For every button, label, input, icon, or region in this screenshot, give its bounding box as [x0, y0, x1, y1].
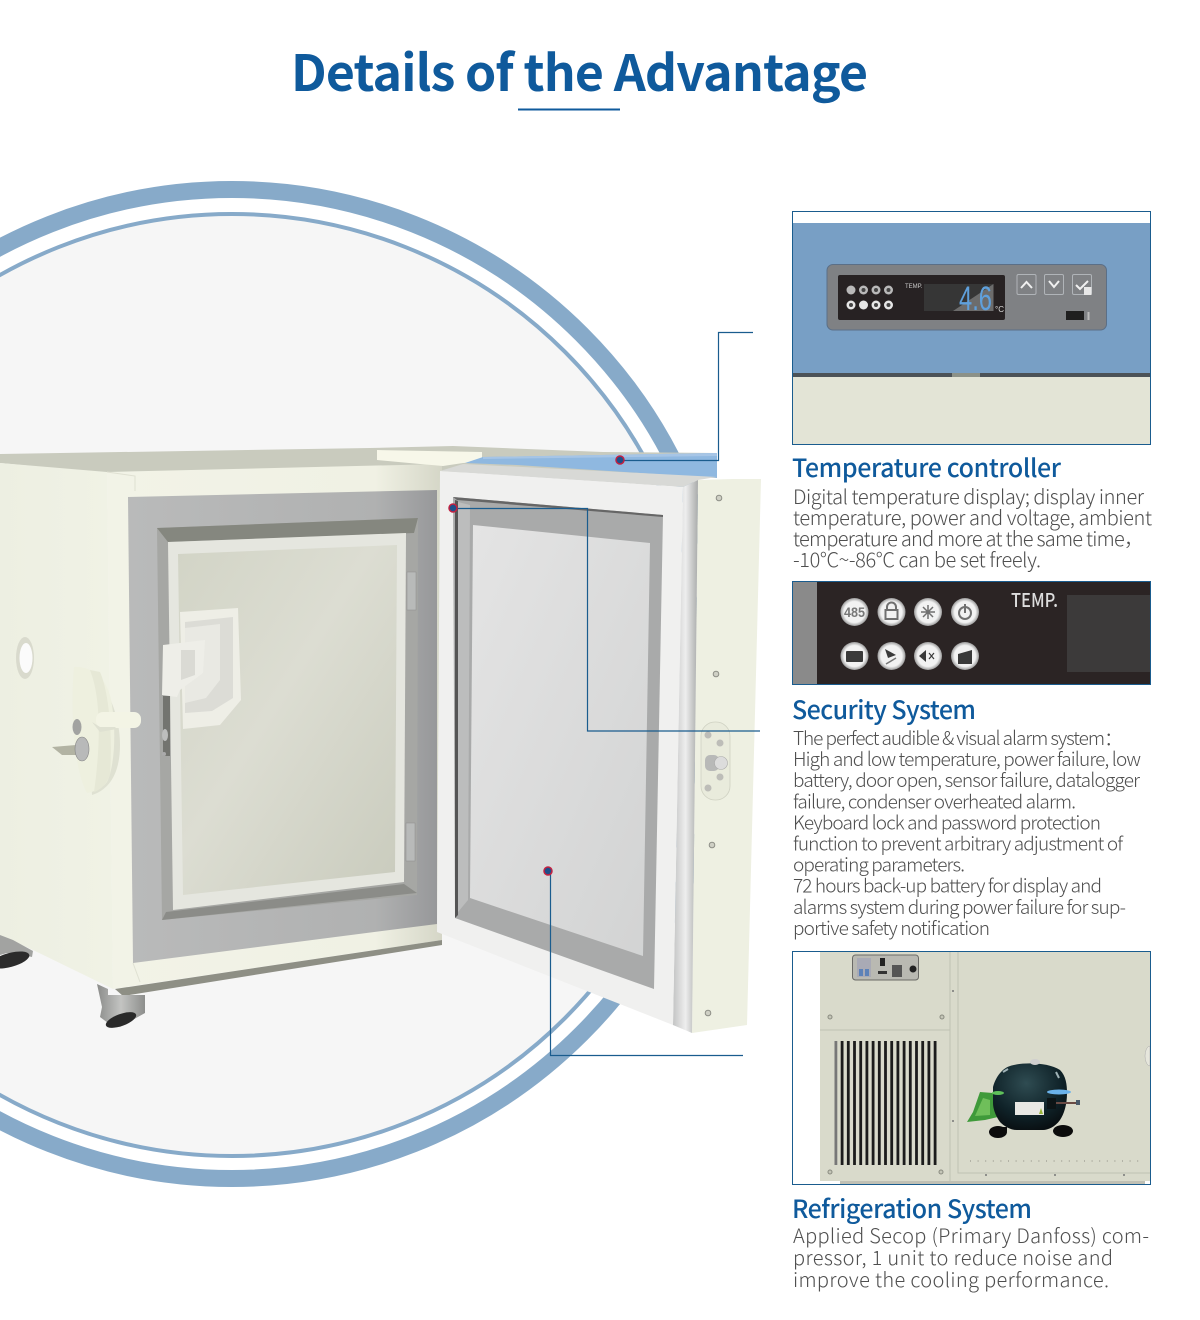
text: security system description: High and low temperature, power failure, low [793, 745, 1141, 772]
background circle rings [0, 190, 726, 1178]
freezer cabinet [0, 446, 717, 1031]
compressor [967, 1059, 1080, 1138]
door handle recess [162, 608, 241, 756]
text: refrigeration system description: Applied Secop (Primary Danfoss) com- [793, 1220, 1149, 1249]
strip under blue [440, 464, 717, 487]
screws [828, 1015, 944, 1174]
cabinet dividers [820, 952, 1150, 1181]
text: refrigeration system description: pressor, 1 unit to reduce noise and [793, 1242, 1113, 1271]
text: refrigeration system description: improve the cooling performance. [793, 1264, 1109, 1293]
callout line: refrigeration system [544, 867, 743, 1056]
door seal [673, 480, 698, 1033]
blue control strip [465, 453, 717, 478]
text: security system description: battery, door open, sensor failure, datalogger [793, 766, 1140, 793]
heading: temperature controller: Temperature controller [792, 449, 1062, 485]
dotted holes [952, 990, 1125, 1176]
text: security system description: portive safety notification [793, 914, 990, 941]
control panel [827, 264, 1106, 330]
title: Details of the Advantage [291, 34, 868, 106]
panel: temperature controller image: 4.6 [959, 280, 992, 318]
text: security system description: Keyboard lock and password protection [793, 808, 1101, 835]
top white shelf [377, 450, 482, 466]
cabinet side panel [0, 463, 113, 989]
text: security system description: operating parameters. [793, 851, 965, 878]
text: security system description: alarms system during power failure for sup- [793, 893, 1126, 920]
heading: refrigeration system: Refrigeration System [792, 1190, 1032, 1226]
panel: security system image: 485 [844, 604, 865, 620]
cabinet front panel [107, 464, 442, 989]
door inner panel [470, 525, 650, 956]
open door [437, 471, 761, 1033]
door side cream panel [692, 479, 761, 1033]
temperature display: TEMP. [905, 284, 923, 290]
inner door [168, 533, 406, 910]
panel: temperature controller image: °C [995, 305, 1004, 314]
panel: security system image [792, 582, 1150, 684]
alarm icons [840, 598, 979, 670]
text: security system description: function to prevent arbitrary adjustment of [793, 830, 1124, 856]
casters [0, 935, 145, 1031]
callout line: temperature controller [616, 332, 753, 464]
door screws [705, 495, 722, 1016]
panel: temperature controller image [792, 212, 1150, 444]
cabinet top surface [0, 446, 717, 478]
panel: refrigeration system image [792, 952, 1150, 1184]
callout line: security system [449, 504, 760, 731]
text: temperature controller description: -10°C~-86°C can be set freely. [793, 544, 1041, 573]
connector plate [852, 955, 918, 980]
panel: security system image: TEMP. [1011, 586, 1058, 613]
buttons [1017, 274, 1092, 294]
small status icons [846, 286, 893, 310]
door grey inner frame [453, 497, 663, 989]
text: security system description: 72 hours back-up battery for display and [793, 872, 1102, 899]
door latch plate [701, 722, 730, 800]
text: security system description: failure, condenser overheated alarm. [793, 787, 1076, 814]
side porthole [16, 637, 34, 679]
USB port [1066, 311, 1084, 320]
text: security system description [793, 724, 1141, 941]
heading: security system: Security System [792, 691, 976, 727]
vent slots [834, 1041, 936, 1165]
text: temperature controller description: temperature and more at the same time， [793, 523, 1144, 552]
outer grey door frame [128, 490, 437, 963]
text: refrigeration system description [793, 1220, 1149, 1293]
text: security system description: The perfect audible & visual alarm system： [793, 724, 1123, 751]
text: temperature controller description: Digital temperature display; display inner [793, 481, 1145, 510]
text: temperature controller description [793, 481, 1152, 573]
door white frame [437, 471, 683, 1025]
text: temperature controller description: temperature, power and voltage, ambient [793, 502, 1152, 531]
hinges [406, 572, 416, 861]
lock wheel and key [52, 667, 141, 795]
